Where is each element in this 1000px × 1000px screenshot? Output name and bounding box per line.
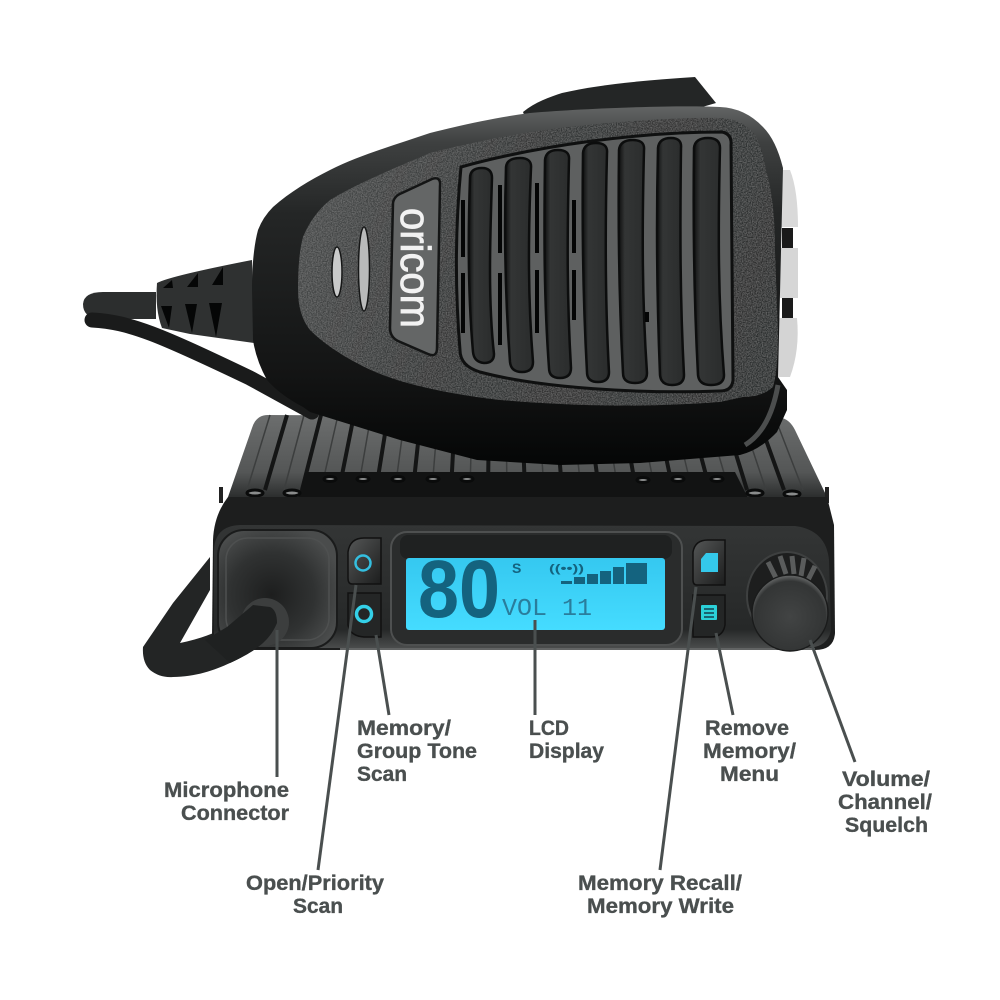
leader line: remove memory <box>716 633 733 715</box>
leader line: memory recall <box>660 587 696 870</box>
radio front panel <box>214 525 831 648</box>
open priority scan button <box>348 538 381 584</box>
leader line: memory group tone scan <box>376 635 389 715</box>
label: Memory/Group Tone Scan: Scan <box>357 763 407 786</box>
label: Volume/Channel/Squelch: Squelch <box>845 814 928 837</box>
memory group tone scan button <box>348 593 381 637</box>
signal icon: ((••)) <box>549 563 585 575</box>
grille slots <box>469 138 724 385</box>
label: Remove Memory/Menu: Memory/ <box>703 740 796 763</box>
radio heat-sink fins <box>219 415 829 503</box>
grille frame <box>456 132 733 392</box>
label: Memory/Group Tone Scan: Memory/ <box>357 717 451 740</box>
fin end bumps <box>247 476 800 497</box>
label: Remove Memory/Menu <box>703 717 796 786</box>
label: LCD Display: Display <box>529 740 604 763</box>
label: Microphone Connector <box>164 779 289 825</box>
label: Remove Memory/Menu: Remove <box>705 717 789 740</box>
channel number 80: 80 <box>418 544 500 635</box>
upper microphone cable <box>83 292 312 412</box>
label: LCD Display <box>529 717 604 763</box>
label: Memory Recall/Memory Write <box>578 872 742 918</box>
microphone top tab <box>523 77 716 130</box>
label: LCD Display: LCD <box>529 717 569 740</box>
radio front body <box>212 497 835 650</box>
S indicator: S <box>512 560 521 576</box>
logo plate <box>390 178 440 355</box>
microphone body <box>252 106 787 465</box>
label: Open/Priority Scan <box>246 872 384 918</box>
label: Open/Priority Scan: Open/Priority <box>246 872 384 895</box>
label: Microphone Connector: Connector <box>181 802 289 825</box>
cable strain relief <box>157 260 254 343</box>
indicator oval small <box>332 247 342 297</box>
remove memory menu button <box>693 595 725 637</box>
label: Volume/Channel/Squelch: Volume/ <box>842 768 930 791</box>
grommet inner ridge <box>226 538 329 640</box>
label: Microphone Connector: Microphone <box>164 779 289 802</box>
label: Remove Memory/Menu: Menu <box>720 763 779 786</box>
microphone face <box>298 118 778 406</box>
hand microphone <box>252 77 798 465</box>
oricom logo: oricom <box>392 208 439 328</box>
lower microphone cable loop <box>143 557 277 677</box>
indicator oval large <box>358 227 370 311</box>
leader line: microphone connector <box>276 630 278 777</box>
label: Volume/Channel/Squelch <box>838 768 932 837</box>
leader line: open priority scan <box>318 585 356 870</box>
volume channel squelch knob <box>747 552 828 651</box>
side buttons <box>777 170 798 377</box>
memory recall button <box>693 540 725 585</box>
label: Memory Recall/Memory Write: Memory Recall/ <box>578 872 742 895</box>
label: Volume/Channel/Squelch: Channel/ <box>838 791 932 814</box>
label: Open/Priority Scan: Scan <box>293 895 343 918</box>
leader line: volume <box>810 640 855 762</box>
cable into grommet <box>205 598 289 663</box>
grille slits <box>463 183 647 345</box>
label: Memory/Group Tone Scan: Group Tone <box>357 740 477 763</box>
VOL 11 text: VOL 11 <box>502 596 592 623</box>
signal bars <box>561 563 647 584</box>
label: Memory/Group Tone Scan <box>357 717 477 786</box>
LCD bezel <box>391 532 682 645</box>
LCD screen <box>406 544 665 635</box>
radio unit <box>205 415 835 663</box>
right rim highlight <box>745 385 778 445</box>
microphone connector grommet <box>218 530 337 648</box>
leader line: LCD display <box>534 620 536 715</box>
panel light edge <box>340 648 815 650</box>
label: Memory Recall/Memory Write: Memory Write <box>587 895 734 918</box>
